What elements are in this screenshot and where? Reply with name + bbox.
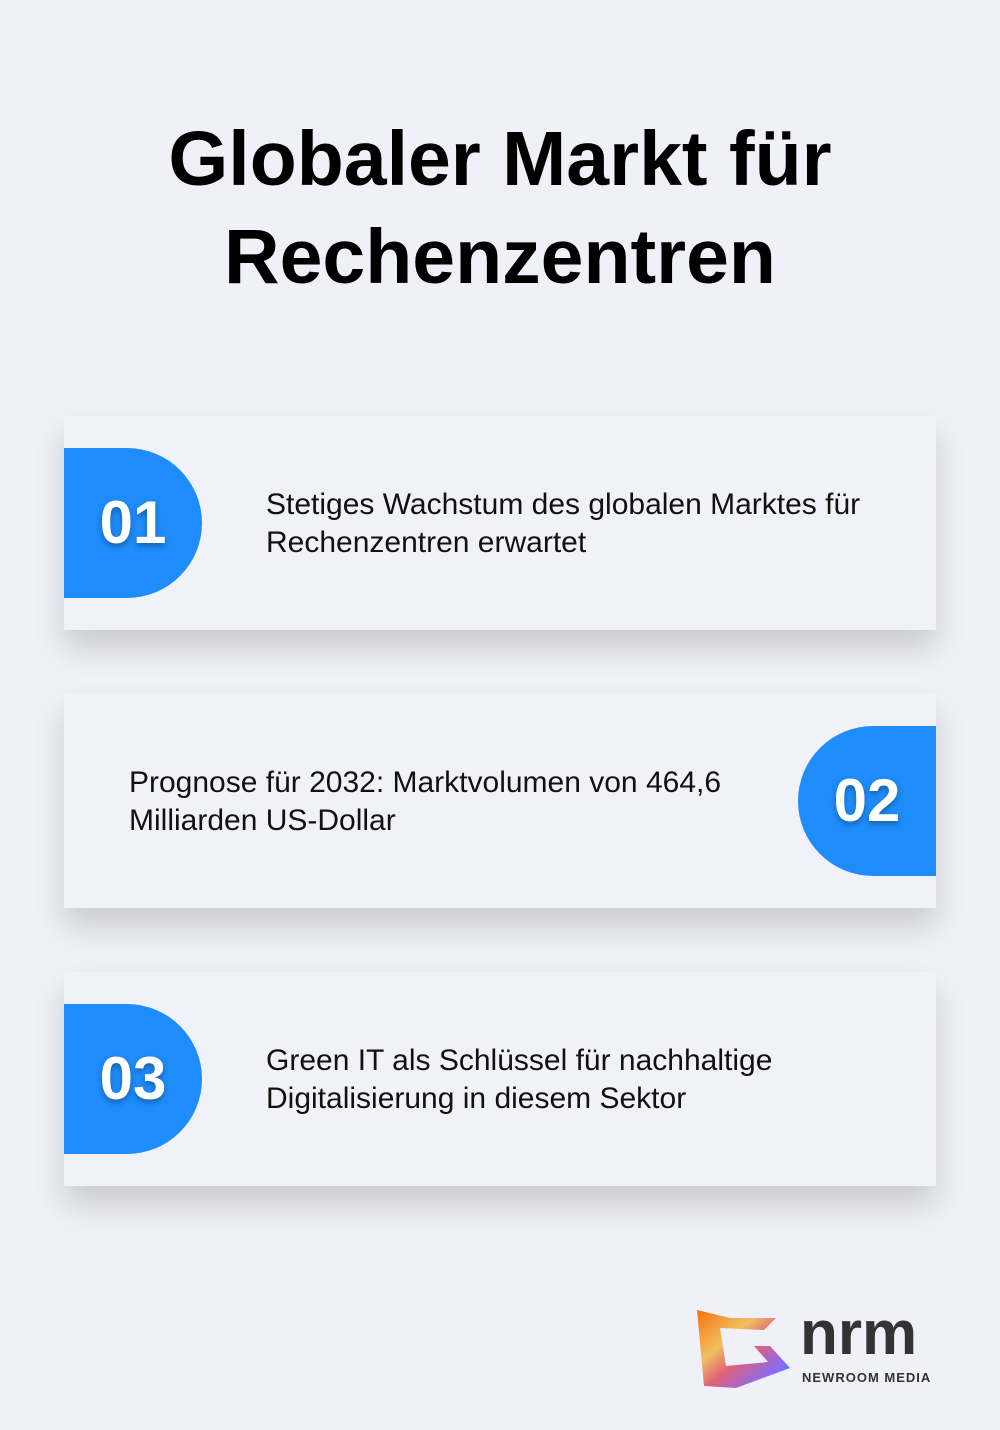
panel: card 03 (64, 972, 936, 1186)
text 02 (129, 766, 721, 837)
text 03: Green IT als Schlüssel für nachhaltige (266, 1044, 772, 1077)
text 03: Digitalisierung in diesem Sektor (266, 1082, 686, 1115)
text 01 (266, 488, 860, 559)
badge 03: 03 (100, 1045, 166, 1112)
badge 02: 02 (834, 767, 900, 834)
title (168, 116, 832, 300)
text 02: Milliarden US-Dollar (129, 804, 396, 837)
logo text: nrm (800, 1299, 917, 1368)
logo (697, 1299, 931, 1388)
text 01: Rechenzentren erwartet (266, 526, 586, 559)
text 02: Prognose für 2032: Marktvolumen von 464,6 (129, 766, 721, 799)
badge 03 (64, 1004, 202, 1154)
text 03 (266, 1044, 772, 1115)
title: Rechenzentren (224, 214, 776, 300)
badge 02 (798, 726, 936, 876)
panel: card 02 (64, 694, 936, 908)
title: Globaler Markt für (168, 116, 832, 202)
badge 01: 01 (100, 489, 166, 556)
text 01: Stetiges Wachstum des globalen Marktes für (266, 488, 860, 521)
panel: card 01 (64, 416, 936, 630)
badge 01 (64, 448, 202, 598)
icon: logo mark (697, 1310, 790, 1388)
logo: NEWROOM MEDIA (802, 1370, 931, 1385)
